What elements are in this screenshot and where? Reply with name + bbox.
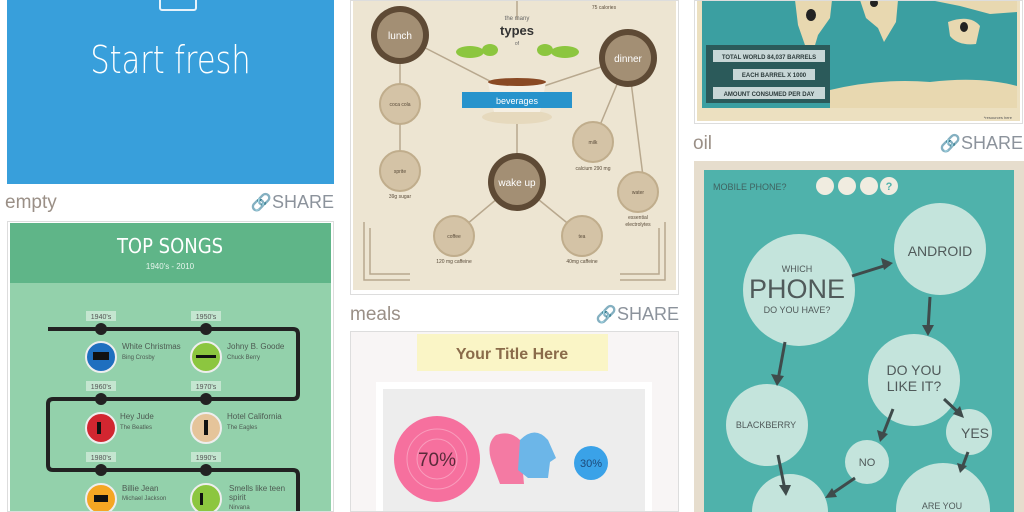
title: top songs: TOP SONGS (116, 234, 223, 258)
panel: oil map: *resources here (984, 115, 1013, 120)
legend: EACH BARREL X 1000 (742, 73, 807, 79)
panel: mobile phone flowchart: YES (961, 425, 989, 441)
arrows (771, 258, 968, 498)
song text: Hey Jude (120, 412, 154, 421)
header: ? (886, 181, 893, 193)
title: types of: types (500, 23, 534, 38)
circles (726, 203, 992, 512)
year labels: 1960's (91, 384, 112, 391)
node: lunch: lunch (388, 31, 412, 42)
panel: beverages: coffee (447, 234, 461, 240)
title: top songs (116, 234, 223, 271)
song text: Nirvana (229, 505, 250, 511)
share: oil: 🔗SHARE (940, 133, 1023, 153)
panel: mobile phone flowchart: DO YOU HAVE? (764, 305, 830, 315)
chart: 70% circle: 70% (418, 450, 456, 471)
header (713, 177, 898, 195)
panel: beverages: 39g sugar (389, 194, 411, 200)
panel: beverages: 120 mg caffeine (436, 259, 472, 265)
panel: beverages: 40mg caffeine (566, 259, 598, 265)
year labels: 1970's (196, 384, 217, 391)
timeline (48, 329, 298, 512)
title: top songs: 1940's - 2010 (146, 262, 195, 271)
song text: The Eagles (227, 425, 257, 431)
title box (417, 334, 608, 371)
chart: 30% circle (574, 446, 608, 480)
song text (120, 342, 285, 511)
chart: 30% circle: 30% (580, 458, 602, 470)
panel: meals (350, 331, 679, 512)
song text: Smells like teen (229, 484, 285, 493)
ribbon: beverages: beverages (496, 96, 539, 106)
header: MOBILE PHONE? (713, 182, 787, 192)
panel: mobile phone flowchart: ANDROID (908, 243, 972, 259)
year labels: 1940's (91, 314, 112, 321)
node: dinner: dinner (614, 54, 643, 65)
panel: mobile phone flowchart: DO YOU (887, 362, 941, 378)
panel: start fresh (7, 0, 334, 184)
node: wake up: wake up (497, 178, 536, 189)
panel: beverages: 75 calories (592, 5, 617, 11)
icon: cup (482, 78, 552, 124)
song icons (86, 342, 221, 512)
panel: top songs (7, 221, 334, 512)
legend: AMOUNT CONSUMED PER DAY (724, 92, 814, 98)
share: empty: 🔗SHARE (251, 192, 334, 212)
oil drops (806, 0, 968, 32)
panel: beverages: milk (589, 140, 598, 146)
panel: mobile phone flowchart: LIKE IT? (887, 378, 941, 394)
legend (706, 45, 830, 103)
song text: Billie Jean (122, 484, 158, 493)
title: types of: the many (505, 16, 529, 22)
leaves (456, 44, 579, 58)
song text: Chuck Berry (227, 355, 260, 361)
year labels (86, 311, 221, 462)
node: wake up (488, 153, 546, 211)
panel: oil map (694, 0, 1023, 124)
panel: mobile phone flowchart: ARE YOU (922, 501, 962, 511)
panel: beverages: electrolytes (625, 222, 651, 228)
panel: mobile phone flowchart: PHONE (749, 274, 845, 304)
panel: beverages: essential (628, 215, 648, 221)
panel: mobile phone flowchart: NO (859, 457, 876, 469)
label: empty: empty (5, 192, 57, 213)
ribbon: beverages (462, 92, 572, 108)
icon: heads (489, 432, 556, 484)
title: types of (500, 16, 534, 47)
panel: mobile phone flowchart (694, 161, 1024, 512)
song text: Hotel California (227, 412, 282, 421)
icon: blank page (159, 0, 197, 11)
song text: The Beatles (120, 425, 152, 431)
year labels: 1990's (196, 455, 217, 462)
song text: Michael Jackson (122, 496, 166, 502)
panel: mobile phone flowchart: WHICH (782, 264, 812, 274)
song text: Johny B. Goode (227, 342, 285, 351)
panel: beverages (350, 0, 679, 295)
year labels: 1980's (91, 455, 112, 462)
panel: mobile phone flowchart: BLACKBERRY (736, 420, 796, 430)
small nodes (380, 84, 658, 256)
panel: beverages: water (632, 190, 644, 196)
legend: TOTAL WORLD 84,037 BARRELS (722, 55, 816, 61)
panel: beverages: sprite (394, 169, 406, 175)
node: dinner (599, 29, 657, 87)
chart: 70% circle (394, 416, 480, 502)
share: meals: 🔗SHARE (596, 304, 679, 324)
title: types of: of (515, 41, 520, 47)
song text: Bing Crosby (122, 355, 155, 361)
node: lunch (371, 6, 429, 64)
panel: beverages: calcium 290 mg (575, 166, 611, 172)
label: oil: oil (693, 133, 712, 154)
panel: beverages: coca cola (389, 102, 411, 108)
song text: spirit (229, 493, 247, 502)
heading: start fresh: Start fresh (90, 38, 251, 82)
map land (795, 0, 1017, 108)
title box: Your Title Here (456, 346, 568, 363)
year labels: 1950's (196, 314, 217, 321)
song text: White Christmas (122, 342, 181, 351)
label: meals: meals (350, 304, 401, 325)
panel: beverages: tea (579, 234, 586, 240)
